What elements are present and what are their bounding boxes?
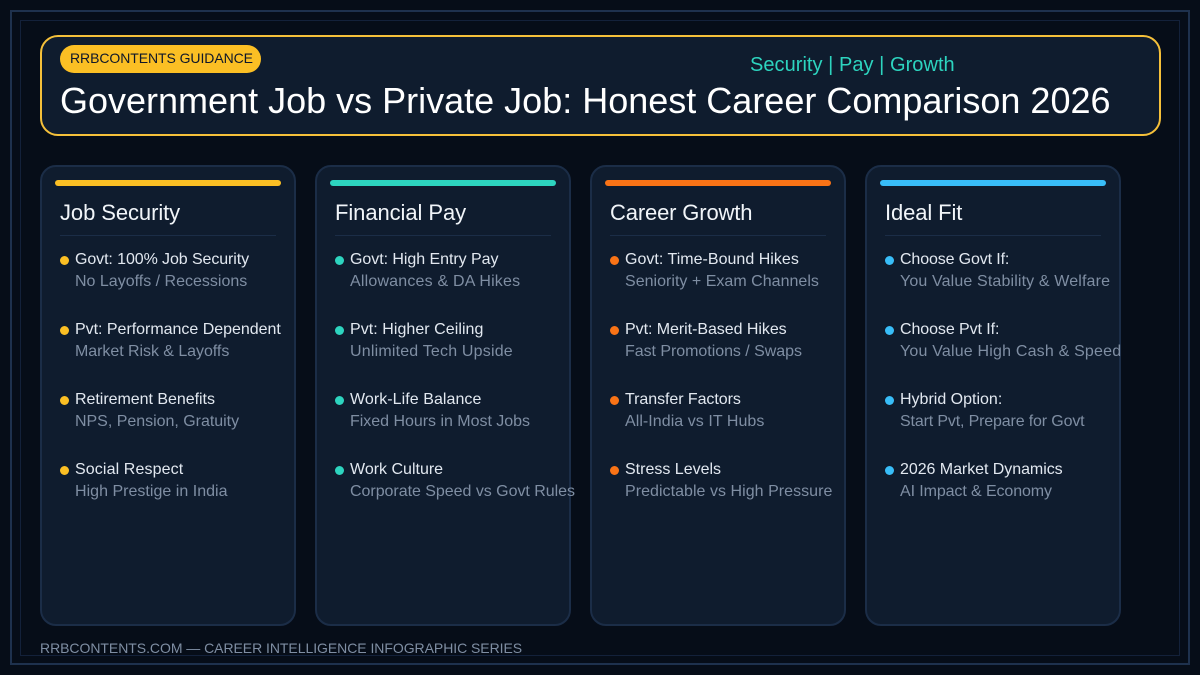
heading: Ideal Fit: Ideal Fit [885,200,962,225]
panel: Career Growth [590,165,846,626]
item: 100% job security: No Layoffs / Recessions [75,273,247,290]
header panel [40,35,1161,136]
item: choose govt: You Value Stability & Welfare [900,273,1110,290]
item: choose pvt [885,321,1121,360]
item: higher ceiling: Pvt: Higher Ceiling [350,321,483,338]
item: work-life balance [335,391,530,430]
accent bar: Ideal Fit [880,180,1106,186]
item: performance dependent: Market Risk & Layoffs [75,343,229,360]
heading: Financial Pay: Financial Pay [335,200,466,225]
item: stress levels: Predictable vs High Pressure [625,483,832,500]
item: work-life balance: Work-Life Balance [350,391,481,408]
item: social respect: Social Respect [75,461,183,478]
panel: Ideal Fit [865,165,1121,626]
item: higher ceiling: Unlimited Tech Upside [350,343,513,360]
item: hybrid option: Hybrid Option: [900,391,1002,408]
panel: Financial Pay [315,165,571,626]
item: high entry pay: Govt: High Entry Pay [350,251,498,268]
item: retirement benefits: NPS, Pension, Gratuity [75,413,239,430]
item: work culture: Work Culture [350,461,443,478]
item: high entry pay: Allowances & DA Hikes [350,273,520,290]
item: social respect [60,461,228,500]
panel: Job Security [40,165,296,626]
item: 2026 market dynamics [885,461,1063,500]
item: choose pvt: You Value High Cash & Speed [900,343,1121,360]
item: time-bound hikes: Govt: Time-Bound Hikes [625,251,799,268]
badge: RRBCONTENTS GUIDANCE [60,45,261,73]
accent bar: Career Growth [605,180,831,186]
item: 2026 market dynamics: AI Impact & Economy [900,483,1052,500]
item: transfer factors [610,391,764,430]
item: retirement benefits: Retirement Benefits [75,391,215,408]
item: merit-based hikes: Fast Promotions / Swaps [625,343,802,360]
item: stress levels [610,461,832,500]
accent bar: Job Security [55,180,281,186]
heading: Career Growth: Career Growth [610,200,752,225]
item: time-bound hikes: Seniority + Exam Channels [625,273,819,290]
accent bar: Financial Pay [330,180,556,186]
badge: RRBCONTENTS GUIDANCE: RRBCONTENTS GUIDANCE [70,50,253,66]
title: Government Job vs Private Job: Honest Career Comparison 2026 [60,80,1111,121]
item: choose govt [885,251,1110,290]
item: performance dependent [60,321,281,360]
item: performance dependent: Pvt: Performance Dependent [75,321,281,338]
item: transfer factors: Transfer Factors [625,391,741,408]
footer: RRBCONTENTS.COM — CAREER INTELLIGENCE INFOGRAPHIC SERIES [40,640,522,656]
item: 2026 market dynamics: 2026 Market Dynamics [900,461,1063,478]
item: stress levels: Stress Levels [625,461,721,478]
heading: Job Security: Job Security [60,200,180,225]
item: 100% job security: Govt: 100% Job Security [75,251,249,268]
item: choose govt: Choose Govt If: [900,251,1009,268]
item: high entry pay [335,251,520,290]
item: retirement benefits [60,391,239,430]
item: time-bound hikes [610,251,819,290]
item: higher ceiling [335,321,513,360]
item: work culture: Corporate Speed vs Govt Rules [350,483,575,500]
item: choose pvt: Choose Pvt If: [900,321,999,338]
item: hybrid option: Start Pvt, Prepare for Govt [900,413,1084,430]
subtitle: Security | Pay | Growth [750,54,955,76]
item: transfer factors: All-India vs IT Hubs [625,413,764,430]
item: work-life balance: Fixed Hours in Most Jobs [350,413,530,430]
item: work culture [335,461,575,500]
item: 100% job security [60,251,250,290]
item: merit-based hikes: Pvt: Merit-Based Hikes [625,321,787,338]
item: social respect: High Prestige in India [75,483,228,500]
item: merit-based hikes [610,321,802,360]
item: hybrid option [885,391,1084,430]
